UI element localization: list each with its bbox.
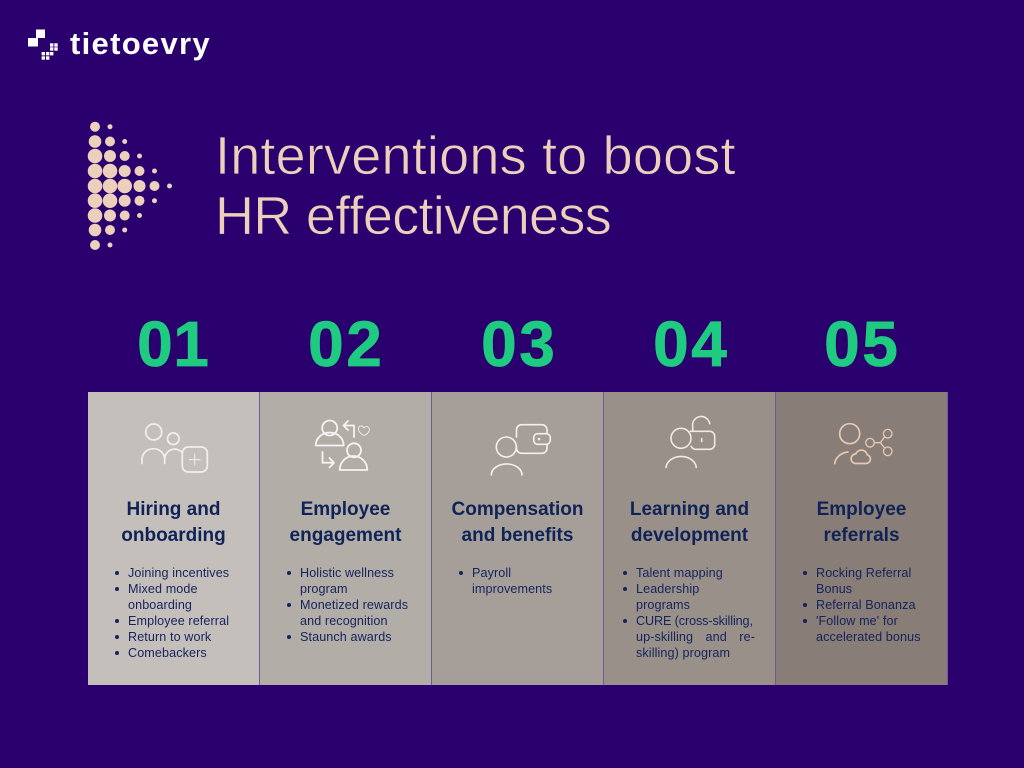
bullet list: Employee referral	[128, 614, 229, 628]
bullet list: improvements	[472, 582, 552, 596]
heading: Employee	[301, 499, 390, 520]
bullet list	[623, 566, 755, 660]
bullet list: 'Follow me' for	[816, 614, 898, 628]
number 02: 02	[308, 308, 384, 380]
heading: development	[631, 525, 748, 546]
icon: person with open lock	[665, 416, 716, 468]
heading	[452, 499, 583, 546]
bullet list: Staunch awards	[300, 630, 392, 644]
heading: Compensation	[452, 499, 583, 520]
heading	[121, 499, 226, 546]
bullet list: Bonus	[816, 582, 852, 596]
bullet list	[459, 566, 552, 596]
bullet list: programs	[636, 598, 690, 612]
heading	[817, 499, 906, 546]
heading: Employee	[817, 499, 906, 520]
bullet list: Talent mapping	[636, 566, 723, 580]
icon: exchange between people	[314, 420, 370, 471]
title	[215, 126, 736, 246]
icon: people with plus	[141, 423, 208, 473]
number 03: 03	[481, 308, 557, 380]
bullet list: CURE (cross-skilling,	[636, 614, 753, 628]
bullet list: Leadership	[636, 582, 699, 596]
bullet list	[115, 566, 229, 660]
number 01: 01	[137, 308, 209, 380]
panel: compensation and benefits	[432, 392, 604, 685]
logo: tietoevry: tietoevry	[70, 26, 211, 61]
panel: employee engagement	[260, 392, 432, 685]
bullet list: up-skilling and re-	[636, 630, 755, 644]
bullet list: accelerated bonus	[816, 630, 921, 644]
title: Interventions to boost	[215, 126, 736, 186]
bullet list: onboarding	[128, 598, 192, 612]
heading: onboarding	[121, 525, 226, 546]
number 05: 05	[824, 308, 900, 380]
heading	[630, 499, 749, 546]
panel: hiring and onboarding	[88, 392, 260, 685]
heading: and benefits	[462, 525, 573, 546]
bullet list	[803, 566, 921, 644]
bullet list: Rocking Referral	[816, 566, 911, 580]
panel: employee referrals	[776, 392, 948, 685]
bullet list: Payroll	[472, 566, 511, 580]
bullet list: program	[300, 582, 348, 596]
icon: dot arrow	[88, 122, 172, 250]
bullet list: Holistic wellness	[300, 566, 394, 580]
heading: engagement	[290, 525, 401, 546]
bullet list: Monetized rewards	[300, 598, 408, 612]
heading: Learning and	[630, 499, 749, 520]
icon: person with wallet	[490, 424, 552, 476]
heading: Hiring and	[127, 499, 220, 520]
panel: learning and development	[604, 392, 776, 685]
bullet list: skilling) program	[636, 646, 730, 660]
bullet list	[287, 566, 408, 644]
bullet list: Mixed mode	[128, 582, 198, 596]
bullet list: Referral Bonanza	[816, 598, 916, 612]
bullet list: Comebackers	[128, 646, 207, 660]
heading: referrals	[823, 525, 900, 546]
bullet list: and recognition	[300, 614, 388, 628]
bullet list: Joining incentives	[128, 566, 229, 580]
icon: person with network	[834, 422, 893, 464]
bullet list: Return to work	[128, 630, 211, 644]
number 04: 04	[653, 308, 729, 380]
heading	[290, 499, 402, 546]
title: HR effectiveness	[215, 186, 611, 246]
